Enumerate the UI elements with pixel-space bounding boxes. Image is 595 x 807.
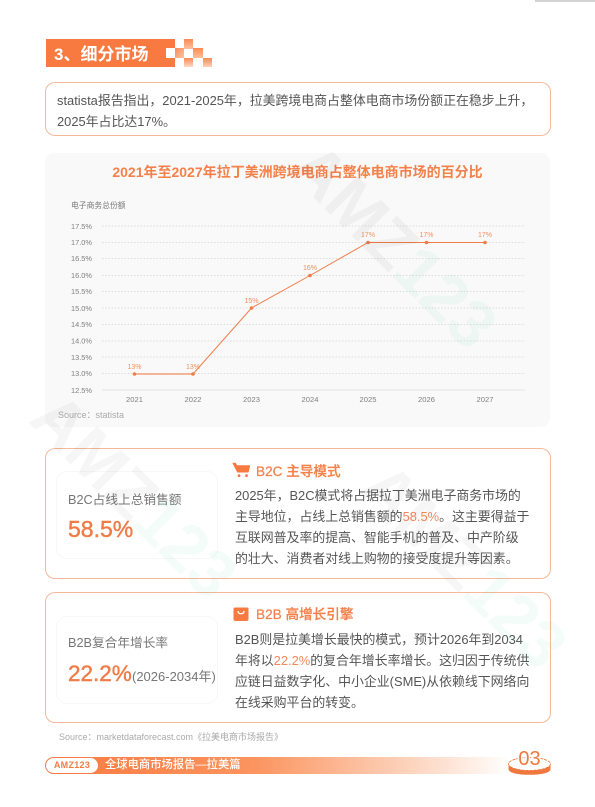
B2C stat value: 58.5% [68, 516, 133, 542]
checker decoration [166, 39, 212, 67]
grid lines [102, 226, 525, 374]
y-axis labels: 17.5% [71, 222, 92, 231]
footer title: 全球电商市场报告—拉美篇 [105, 759, 241, 771]
x-axis labels: 2023 [243, 395, 260, 404]
coin top [508, 758, 550, 770]
y-axis labels: 14.0% [71, 336, 92, 346]
icon: shopping cart [232, 462, 250, 477]
x-axis labels: 2024 [302, 395, 318, 404]
y-axis title: 电子商务总份额 [71, 200, 126, 210]
y-axis labels: 15.0% [71, 304, 92, 313]
data labels [127, 232, 492, 371]
line chart [58, 200, 525, 420]
B2C body text: 互联网普及率的提高、智能手机的普及、中产阶级 [235, 530, 519, 544]
data labels: 13% [127, 364, 142, 371]
footer logo pill [46, 758, 98, 773]
icon: shopping bag [234, 608, 248, 621]
B2B body text: 年将以22.2%的复合年增长率增长。这归因于传统供 [235, 653, 529, 668]
y-axis labels: 16.0% [71, 271, 92, 280]
watermark: lower right: AMZ123 [347, 449, 581, 683]
data labels: 13% [186, 364, 200, 371]
B2C body text: 的壮大、消费者对线上购物的接受度提升等因素。 [235, 550, 519, 566]
y-axis labels: 14.5% [71, 320, 92, 329]
intro text box [45, 82, 551, 136]
chart source: Source：statista [58, 410, 124, 420]
B2B stat card [57, 617, 217, 703]
data labels: 17% [419, 232, 434, 239]
top edge mark [535, 0, 595, 2]
panel: line chart [45, 153, 550, 427]
B2B body text: 应链日益数字化、中小企业(SME)从依赖线下网络向 [235, 674, 529, 689]
footer banner [45, 757, 510, 774]
B2C heading: B2C 主导模式 [256, 464, 341, 479]
page number coin [508, 748, 551, 775]
B2C body text: 主导地位，占线上总销售额的58.5%。这主要得益于 [235, 508, 529, 524]
data labels: 17% [478, 232, 492, 239]
watermark: upper right: AMZ123 [277, 129, 511, 363]
x axis [102, 389, 525, 391]
intro text: 2025年占比达17%。 [57, 114, 176, 129]
B2B stat label: B2B复合年增长率 [68, 636, 168, 650]
source note: Source：marketdataforecast.com《拉美电商市场报告》 [59, 732, 283, 742]
footer logo pill: AMZ123 [54, 760, 90, 770]
x-axis labels: 2021 [126, 395, 143, 404]
data labels: 15% [244, 298, 259, 305]
B2C stat card [57, 472, 217, 558]
y-axis labels [71, 222, 92, 395]
B2B period: (2026-2034年) [132, 669, 216, 684]
watermark: lower left: AMZ123 [17, 379, 251, 613]
x-axis labels: 2026 [418, 395, 435, 404]
B2B body text [235, 632, 529, 710]
B2B stat value [68, 661, 216, 686]
B2C body text [235, 488, 529, 566]
chart title: 2021年至2027年拉丁美洲跨境电商占整体电商市场的百分比 [112, 164, 483, 180]
data labels: 17% [361, 232, 375, 239]
x-axis labels: 2027 [477, 395, 493, 404]
B2B heading: B2B 高增长引擎 [256, 607, 353, 622]
page number: 03 [518, 748, 541, 770]
B2B growth percent: 22.2% [68, 661, 132, 686]
y-axis labels: 13.5% [71, 353, 92, 362]
y-axis labels: 16.5% [71, 254, 92, 263]
heading bar: 3、细分市场 [54, 45, 148, 64]
B2B body text: B2B则是拉美增长最快的模式，预计2026年到2034 [235, 632, 523, 647]
intro text [57, 93, 533, 129]
y-axis labels: 15.5% [71, 287, 92, 296]
panel: B2C [45, 448, 551, 579]
y-axis labels: 17.0% [71, 238, 92, 247]
y-axis labels: 12.5% [71, 386, 92, 395]
coin base [508, 765, 550, 775]
x-axis labels: 2025 [360, 395, 376, 404]
heading bar [46, 39, 175, 67]
thick first segment [134, 373, 193, 375]
B2B body text: 在线采购平台的转变。 [235, 695, 364, 710]
B2C body text: 2025年，B2C模式将占据拉丁美洲电子商务市场的 [235, 488, 521, 502]
x-axis labels [126, 395, 493, 404]
B2C stat label: B2C占线上总销售额 [68, 493, 182, 507]
x-axis labels: 2022 [185, 395, 201, 404]
y-axis labels: 13.0% [71, 369, 92, 378]
data labels: 16% [303, 265, 317, 272]
panel: B2B [45, 592, 551, 723]
data line [134, 242, 485, 374]
section heading [46, 39, 212, 67]
data points [133, 241, 487, 376]
intro text: statista报告指出，2021-2025年，拉美跨境电商占整体电商市场份额正在稳步上升， [57, 93, 533, 108]
